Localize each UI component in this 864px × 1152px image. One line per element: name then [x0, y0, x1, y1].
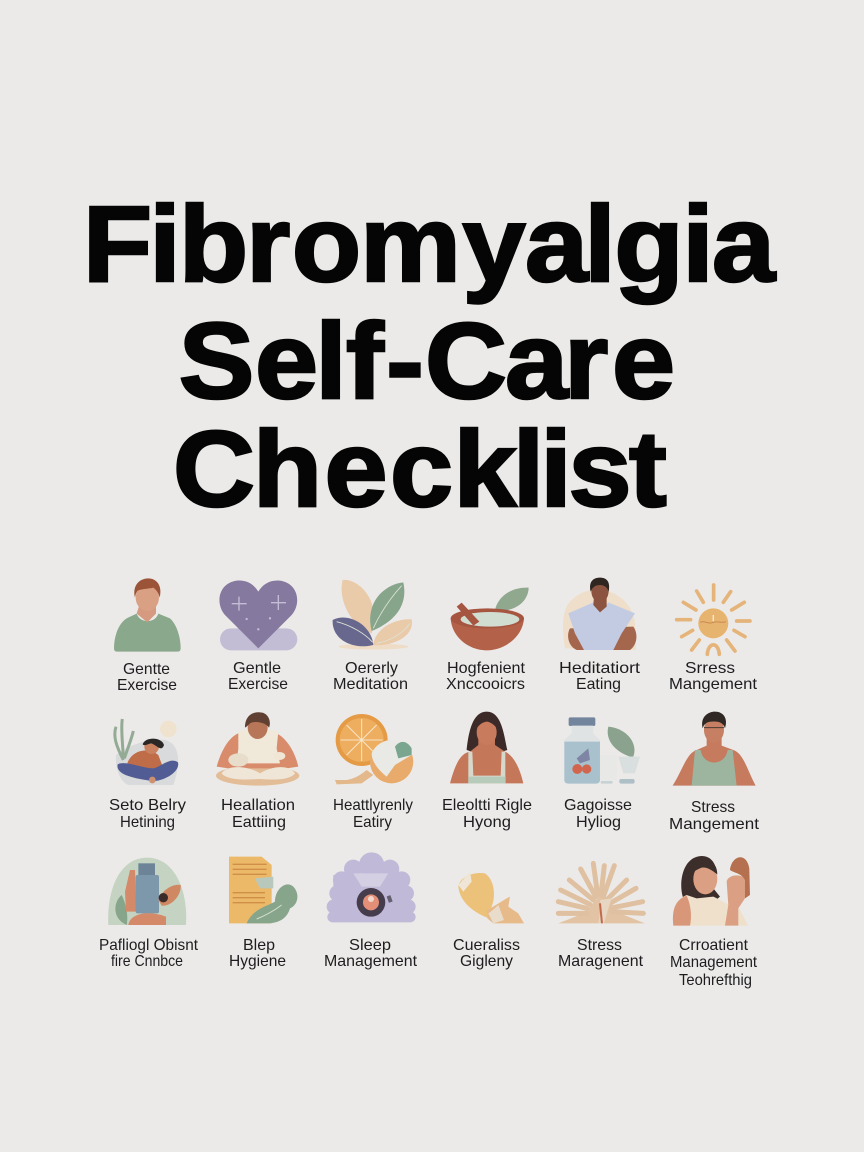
item: woman with raised hand [670, 856, 758, 989]
title: Self-Care [179, 301, 675, 421]
label: Stress [691, 799, 735, 816]
label: Gentle [233, 660, 281, 677]
label: Hogfenient [447, 660, 526, 677]
item: stress management man [669, 712, 760, 833]
item: sleep management cloud [324, 852, 418, 970]
label [228, 660, 288, 693]
label: Maragenent [558, 953, 644, 970]
label: Oererly [345, 660, 398, 677]
label [670, 937, 758, 989]
label: Gentte [123, 661, 170, 678]
title: Fibromyalgia [83, 184, 777, 304]
item: healthy eating [333, 714, 413, 831]
label: Management [670, 954, 758, 971]
label: Pafliogl Obisnt [99, 937, 199, 954]
label: fire Cnnbce [111, 953, 183, 970]
label: Srress [685, 660, 735, 677]
label: Hyong [463, 814, 511, 831]
label: Eatiry [353, 814, 392, 831]
icon: woman raising hand [673, 856, 750, 926]
icon: woman with long hair [450, 712, 523, 783]
label: Management [324, 953, 418, 970]
label: Seto Belry [109, 797, 186, 814]
label: Stress [577, 937, 622, 954]
label: Teohrefthig [679, 972, 752, 989]
label [333, 660, 408, 693]
icon: man in blue shirt [563, 578, 636, 650]
label [99, 937, 199, 970]
icon: purple heart [219, 581, 297, 650]
icon: cross-legged figure [216, 712, 299, 786]
item: meditation eating [216, 712, 299, 831]
label: Eating [576, 676, 621, 693]
icon: seated figure with plant [115, 719, 178, 785]
icon: lilac cloud with eye [327, 852, 416, 922]
label: Exercise [117, 677, 177, 694]
title [83, 184, 777, 529]
label: Eattiing [232, 814, 286, 831]
item: gentle exercise person [114, 578, 181, 694]
icon: yellow shape with hand [458, 872, 524, 923]
label [109, 797, 186, 831]
item: man [559, 578, 641, 693]
label: Hetining [120, 814, 175, 831]
item: orderly meditation leaves [333, 580, 412, 693]
label [446, 660, 526, 693]
label [669, 660, 758, 693]
label: Gigleny [460, 953, 513, 970]
item: jar [564, 717, 640, 831]
label [558, 937, 644, 970]
label: Eleoltti Rigle [442, 797, 532, 814]
label: Exercise [228, 676, 288, 693]
item: gentle exercise heart [219, 581, 297, 693]
item: physical ability [99, 858, 199, 970]
icon: leaves [333, 580, 412, 650]
label [559, 660, 641, 693]
label [453, 937, 520, 970]
label [221, 797, 295, 831]
icon: document and leaf [229, 857, 297, 923]
icon: radiating hand rays [558, 863, 645, 923]
item: sun [669, 585, 758, 693]
label: Mangement [669, 676, 758, 693]
icon: bowl with leaf [451, 588, 529, 650]
label: Sleep [349, 937, 391, 954]
label [669, 799, 760, 833]
label: Mangement [669, 816, 760, 833]
label: Gagoisse [564, 797, 632, 814]
item: woman [442, 712, 532, 831]
label: Blep [243, 937, 275, 954]
title: Checklist [173, 409, 667, 529]
item: hand and pear [453, 872, 524, 970]
label: Cueraliss [453, 937, 520, 954]
label: Hygiene [229, 953, 286, 970]
label: Heallation [221, 797, 295, 814]
icon: jar with leaf and cup [564, 717, 640, 784]
label [229, 937, 286, 970]
label: Crroatient [679, 937, 749, 954]
item: sleep hygiene document [229, 857, 297, 970]
label: Xnccooicrs [446, 676, 525, 693]
label [333, 797, 413, 831]
label [564, 797, 632, 831]
item: seated belly breathing [109, 719, 186, 831]
icon: figure with bottle on green dome [108, 858, 186, 925]
label: Heattlyrenly [333, 797, 413, 814]
label: Heditatiort [559, 660, 641, 677]
icon: person in green top [114, 578, 181, 652]
item: bowl [446, 588, 529, 693]
label: Meditation [333, 676, 408, 693]
label [442, 797, 532, 831]
label: Hyliog [576, 814, 621, 831]
icon: orange and coconut [335, 714, 413, 784]
item: fan of rays [558, 863, 645, 970]
label [324, 937, 418, 970]
icon: sun [677, 585, 750, 654]
label [117, 661, 177, 694]
icon: man in green tank top [673, 712, 756, 786]
